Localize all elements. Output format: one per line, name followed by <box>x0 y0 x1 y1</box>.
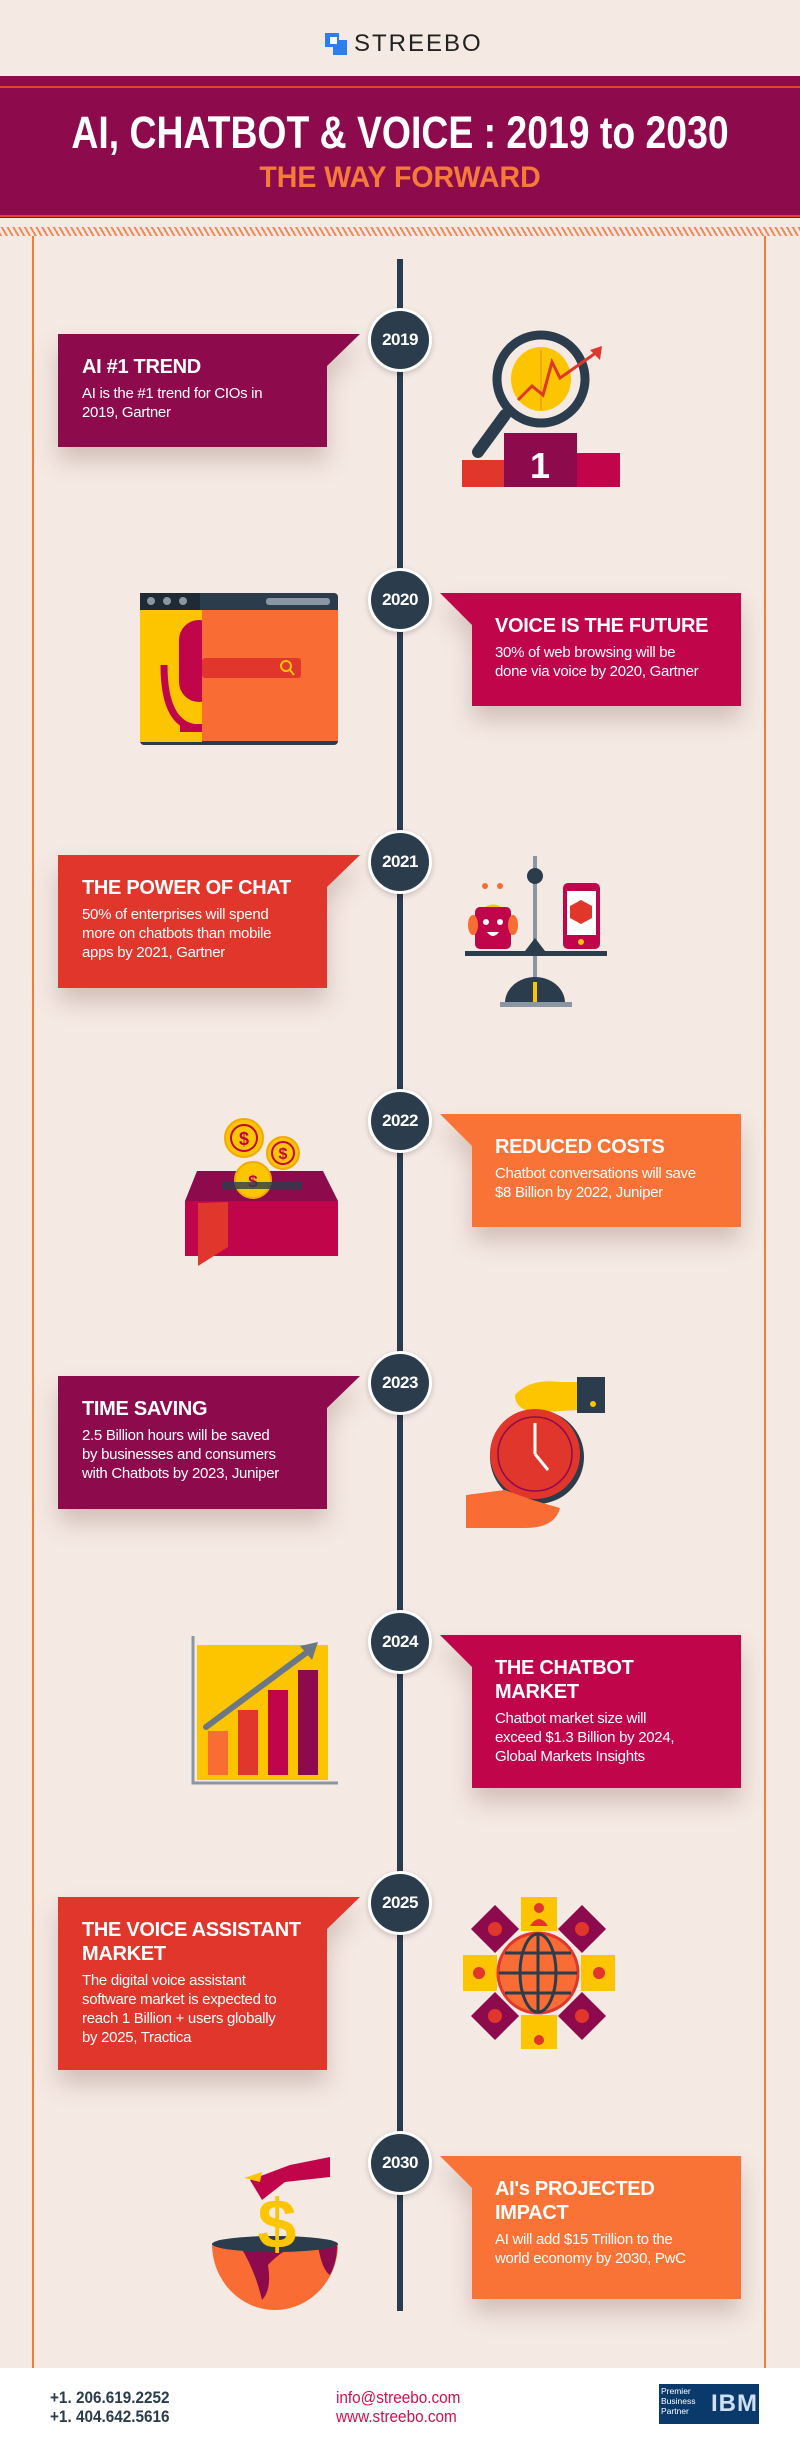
panel: 2020 voice: VOICE IS THE FUTURE <box>495 615 708 637</box>
panel: 2022 costs: Chatbot conversations will save <box>495 1165 696 1182</box>
year 2023: 2023 <box>382 1373 418 1392</box>
panel: 2024 chatbot market: Chatbot market size will <box>495 1710 646 1727</box>
panel: 2030 impact: IMPACT <box>495 2202 568 2224</box>
subtitle: THE WAY FORWARD <box>259 161 541 194</box>
year 2024: 2024 <box>382 1632 418 1651</box>
panel: 2019 AI #1 trend <box>48 334 360 472</box>
year 2019: 2019 <box>382 330 418 349</box>
year 2030 <box>368 2131 432 2195</box>
IBM partner badge <box>659 2384 759 2424</box>
panel: 2020 voice: done via voice by 2020, Gartner <box>495 663 698 680</box>
panel: 2021 chat: apps by 2021, Gartner <box>82 944 225 961</box>
year 2021 <box>368 830 432 894</box>
panel: 2019 AI #1 trend: AI is the #1 trend for CIOs in <box>82 385 262 402</box>
panel: 2024 chatbot market: exceed $1.3 Billion by 2024, <box>495 1729 674 1746</box>
phone numbers <box>50 2388 170 2426</box>
icon: globe network <box>463 1897 615 2049</box>
email and website: www.streebo.com <box>336 2407 457 2426</box>
panel: 2021 chat: more on chatbots than mobile <box>82 925 271 942</box>
panel: 2023 time: TIME SAVING <box>82 1398 207 1420</box>
icon: coins ballot box: $ <box>248 1172 258 1191</box>
year 2022 <box>368 1089 432 1153</box>
year 2025 <box>368 1871 432 1935</box>
panel: 2024 chatbot market <box>440 1635 752 1812</box>
year 2024 <box>368 1610 432 1674</box>
icon: voice browser <box>140 593 338 745</box>
panel: 2025 voice assistant: The digital voice assistant <box>82 1972 246 1989</box>
panel: 2030 impact: world economy by 2030, PwC <box>495 2250 686 2267</box>
panel: 2023 time: by businesses and consumers <box>82 1446 276 1463</box>
panel: 2030 impact: AI will add $15 Trillion to the <box>495 2231 672 2248</box>
phone numbers: +1. 206.619.2252 <box>50 2388 170 2407</box>
footer <box>0 2368 800 2444</box>
IBM partner badge: Partner <box>661 2406 689 2416</box>
IBM partner badge: Business <box>661 2396 696 2406</box>
panel: 2022 costs <box>440 1114 752 1252</box>
title banner <box>0 76 800 218</box>
panel: 2021 chat: 50% of enterprises will spend <box>82 906 268 923</box>
year 2030: 2030 <box>382 2153 418 2172</box>
panel: 2025 voice assistant <box>48 1897 360 2094</box>
panel: 2025 voice assistant: software market is expected to <box>82 1991 276 2008</box>
panel: 2030 impact <box>440 2156 752 2324</box>
panel: 2024 chatbot market: Global Markets Insights <box>495 1748 645 1765</box>
icon: clock in hands <box>466 1377 605 1528</box>
panel: 2019 AI #1 trend: AI #1 TREND <box>82 356 201 378</box>
panel: 2019 AI #1 trend: 2019, Gartner <box>82 404 171 421</box>
year 2020: 2020 <box>382 590 418 609</box>
panel: 2020 voice: 30% of web browsing will be <box>495 644 675 661</box>
phone numbers: +1. 404.642.5616 <box>50 2407 170 2426</box>
icon: magnifier brain podium <box>462 330 620 487</box>
panel: 2021 chat <box>48 855 360 1012</box>
IBM partner badge: Premier <box>661 2386 691 2396</box>
panel: 2021 chat: THE POWER OF CHAT <box>82 877 291 899</box>
year 2022: 2022 <box>382 1111 418 1130</box>
year 2021: 2021 <box>382 852 418 871</box>
icon: coins ballot box: $ <box>279 1146 288 1163</box>
panel: 2024 chatbot market: MARKET <box>495 1681 579 1703</box>
icon: coins ballot box: $ <box>239 1129 249 1149</box>
panel: 2025 voice assistant: by 2025, Tractica <box>82 2029 191 2046</box>
IBM partner badge: IBM <box>711 2390 758 2417</box>
year 2019 <box>368 308 432 372</box>
panel: 2020 voice <box>440 593 752 730</box>
year 2025: 2025 <box>382 1893 418 1912</box>
panel: 2023 time: 2.5 Billion hours will be saved <box>82 1427 269 1444</box>
email and website <box>336 2388 460 2426</box>
icon: dollar into globe bowl <box>212 2157 338 2310</box>
panel: 2025 voice assistant: reach 1 Billion + users globally <box>82 2010 275 2027</box>
panel: 2025 voice assistant: THE VOICE ASSISTANT <box>82 1919 301 1941</box>
panel: 2024 chatbot market: THE CHATBOT <box>495 1657 634 1679</box>
year 2023 <box>368 1351 432 1415</box>
panel: 2022 costs: REDUCED COSTS <box>495 1136 664 1158</box>
icon: magnifier brain podium: 1 <box>530 445 550 486</box>
logo: STREEBO <box>354 30 483 57</box>
icon: dollar into globe bowl: $ <box>258 2185 296 2263</box>
icon: growth chart <box>192 1636 338 1784</box>
panel: 2025 voice assistant: MARKET <box>82 1943 166 1965</box>
icon: chatbot vs app scale <box>465 856 607 1007</box>
year 2020 <box>368 568 432 632</box>
timeline line <box>397 259 403 2311</box>
panel: 2023 time: with Chatbots by 2023, Juniper <box>82 1465 279 1482</box>
panel: 2030 impact: AI's PROJECTED <box>495 2178 654 2200</box>
email and website: info@streebo.com <box>336 2388 460 2407</box>
panel: 2022 costs: $8 Billion by 2022, Juniper <box>495 1184 663 1201</box>
panel: 2023 time <box>48 1376 360 1534</box>
icon: coins ballot box <box>185 1118 338 1266</box>
title: AI, CHATBOT & VOICE : 2019 to 2030 <box>71 107 729 158</box>
